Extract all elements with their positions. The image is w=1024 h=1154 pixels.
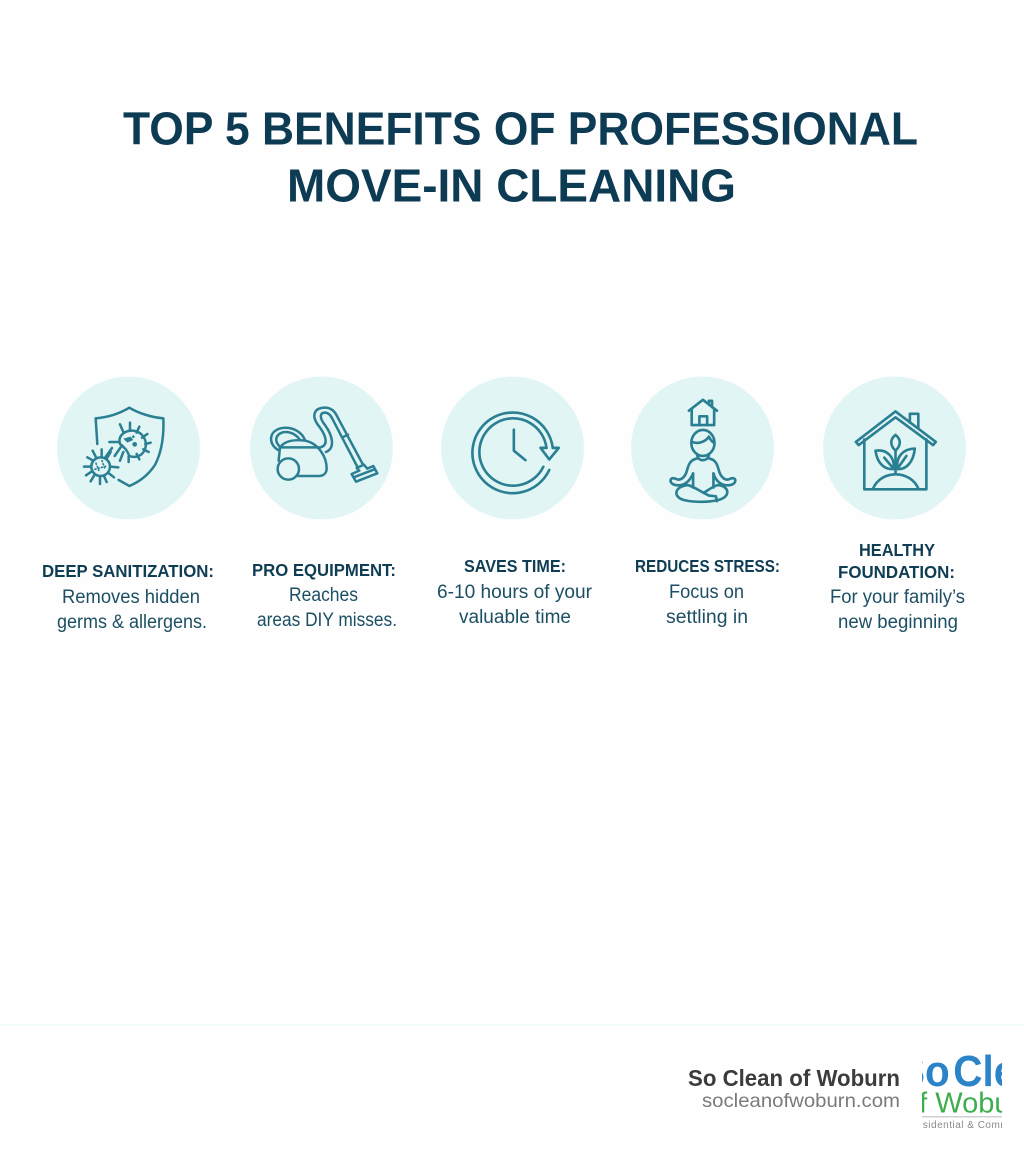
text: pro equipment: PRO EQUIPMENT: bbox=[252, 560, 396, 580]
title: MOVE-IN CLEANING bbox=[287, 160, 736, 212]
text: reduces stress bbox=[635, 556, 780, 628]
panel: pro equipment bbox=[250, 376, 397, 631]
panel: saves time bbox=[437, 376, 593, 628]
text: saves time: valuable time bbox=[459, 607, 571, 628]
icon: meditating person with house bbox=[631, 376, 774, 520]
text: deep sanitization: germs & allergens. bbox=[57, 612, 207, 633]
text: saves time bbox=[437, 556, 593, 628]
title: TOP 5 BENEFITS OF PROFESSIONAL bbox=[123, 102, 918, 154]
panel: reduces stress bbox=[631, 376, 780, 628]
icon: vacuum cleaner bbox=[250, 376, 393, 520]
text: healthy foundation: new beginning bbox=[838, 612, 958, 633]
icon: clock with arrow bbox=[441, 376, 584, 520]
logo bbox=[922, 1054, 1002, 1128]
text: deep sanitization: DEEP SANITIZATION: bbox=[42, 561, 214, 581]
text: healthy foundation: For your family’s bbox=[830, 587, 965, 608]
title bbox=[123, 102, 918, 212]
footer bbox=[0, 1024, 1024, 1128]
text: saves time: 6-10 hours of your bbox=[437, 582, 593, 603]
panel: deep sanitization bbox=[42, 376, 214, 633]
icon: house with plant bbox=[823, 376, 966, 520]
text: pro equipment: Reaches bbox=[289, 585, 358, 606]
text: pro equipment: areas DIY misses. bbox=[257, 610, 397, 631]
text: healthy foundation: HEALTHY bbox=[859, 540, 935, 560]
text: deep sanitization: Removes hidden bbox=[62, 587, 200, 608]
text: reduces stress: Focus on bbox=[669, 582, 744, 603]
text: reduces stress: REDUCES STRESS: bbox=[635, 556, 780, 576]
text: reduces stress: settling in bbox=[666, 607, 748, 628]
text: saves time: SAVES TIME: bbox=[464, 556, 566, 576]
footer website: socleanofwoburn.com bbox=[702, 1090, 900, 1112]
panel: healthy foundation bbox=[823, 376, 966, 633]
text: healthy foundation: FOUNDATION: bbox=[838, 562, 955, 582]
text: healthy foundation bbox=[830, 540, 965, 633]
footer brand name: So Clean of Woburn bbox=[688, 1065, 900, 1091]
text: deep sanitization bbox=[42, 561, 214, 633]
icon: shield with germs bbox=[57, 376, 200, 520]
text: pro equipment bbox=[252, 560, 397, 631]
